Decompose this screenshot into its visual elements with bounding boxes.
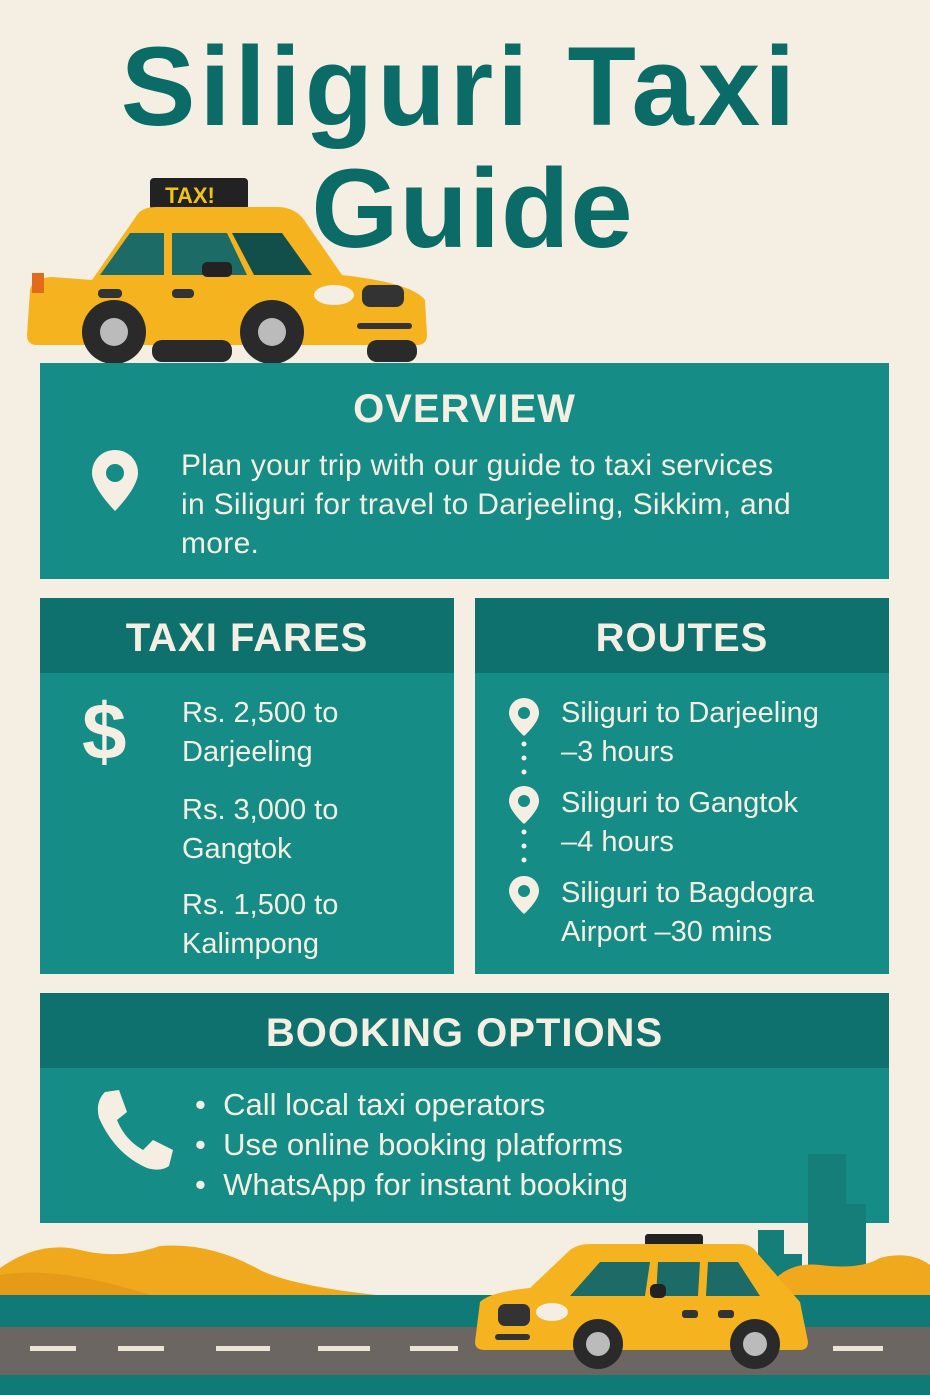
routes list: –4 hours (561, 826, 674, 858)
panel: routes (475, 598, 889, 974)
fares list: Gangtok (182, 833, 292, 865)
icon: bottom taxi (475, 1234, 808, 1369)
title (121, 24, 799, 271)
icon: phone (98, 1090, 173, 1170)
title: Guide (311, 146, 634, 271)
routes list: Siliguri to Bagdogra (561, 877, 814, 909)
heading: taxi fares (40, 598, 454, 673)
heading: booking options (40, 993, 889, 1068)
fares list: Darjeeling (182, 736, 313, 768)
route pins (509, 698, 539, 914)
icon: dollar: $ (82, 687, 126, 776)
panel: booking options (40, 993, 889, 1223)
panel: overview (40, 363, 889, 579)
heading: overview: OVERVIEW (353, 387, 576, 431)
heading: routes (475, 598, 889, 673)
booking list: • Call local taxi operators (195, 1087, 545, 1122)
fares list: Kalimpong (182, 928, 319, 960)
text: overview: Plan your trip with our guide to taxi services in Siliguri for travel to Darjeeling, Sikkim, and more. (181, 449, 791, 560)
panel: taxi fares (40, 598, 454, 974)
heading: routes: ROUTES (596, 616, 768, 660)
fares list (182, 697, 338, 960)
routes list (561, 697, 819, 948)
routes list: Siliguri to Gangtok (561, 787, 798, 819)
booking list (195, 1087, 628, 1202)
booking list: • Use online booking platforms (195, 1127, 623, 1162)
heading: taxi fares: TAXI FARES (126, 616, 368, 660)
bottom scene: road and skyline (0, 1154, 930, 1395)
routes list: Airport –30 mins (561, 916, 772, 948)
routes list: Siliguri to Darjeeling (561, 697, 819, 729)
fares list: Rs. 2,500 to (182, 697, 338, 729)
icon: location pin (92, 450, 138, 511)
heading: booking options: BOOKING OPTIONS (266, 1011, 663, 1055)
fares list: Rs. 3,000 to (182, 794, 338, 826)
icon: top taxi (27, 178, 427, 363)
fares list: Rs. 1,500 to (182, 889, 338, 921)
icon: top taxi: TAX! (165, 183, 215, 208)
title: Siliguri Taxi (121, 24, 799, 149)
routes list: –3 hours (561, 736, 674, 768)
booking list: • WhatsApp for instant booking (195, 1167, 628, 1202)
